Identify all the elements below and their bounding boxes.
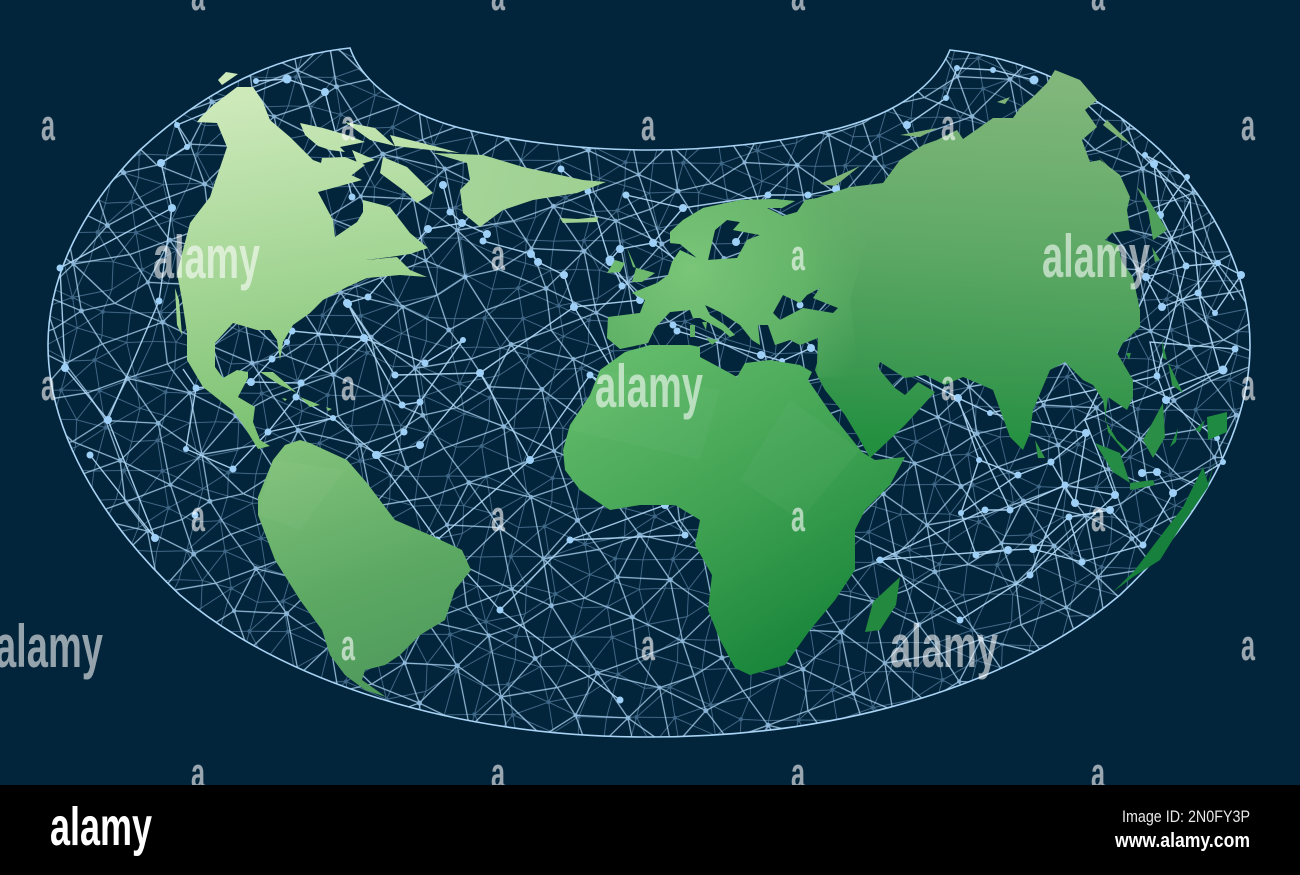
watermark: large alamy marks: alamy <box>0 613 103 680</box>
watermark: small a marks: a <box>641 101 655 150</box>
network map frame <box>40 40 1260 740</box>
watermark: small a marks: a <box>941 101 955 150</box>
Borneo <box>1143 403 1165 458</box>
watermark: large alamy marks <box>0 223 1150 680</box>
image id: Image ID: 2N0FY3P <box>1122 807 1250 826</box>
Philippines <box>1126 340 1183 393</box>
Arctic islands <box>218 72 460 203</box>
map outline <box>48 48 1250 737</box>
watermark: small a marks: a <box>791 231 805 280</box>
New Guinea <box>1170 412 1227 447</box>
British Isles <box>607 248 655 282</box>
watermark: small a marks: a <box>41 101 55 150</box>
continent: Greenland <box>433 153 606 227</box>
watermark: small a marks: a <box>491 231 505 280</box>
watermark: small a marks: a <box>941 361 955 410</box>
watermark: small a marks: a <box>191 492 205 541</box>
watermark: small a marks: a <box>491 749 505 798</box>
watermark: large alamy marks: alamy <box>595 353 703 420</box>
network nodes <box>56 65 1245 704</box>
Caribbean islands <box>260 372 332 411</box>
footer logo: alamy <box>50 797 152 857</box>
Baja California <box>175 288 182 335</box>
watermark: large alamy marks: alamy <box>1042 223 1150 290</box>
continent: Eurasia <box>607 70 1227 592</box>
Japan <box>1137 187 1167 262</box>
footer bar <box>0 785 1300 875</box>
watermark: small a marks: a <box>1241 361 1255 410</box>
Sakhalin and Arctic islands <box>820 97 1130 186</box>
website: www.alamy.com <box>1114 830 1250 852</box>
watermark: small a marks: a <box>1091 492 1105 541</box>
watermark: small a marks: a <box>1241 101 1255 150</box>
watermark: small a marks: a <box>341 621 355 670</box>
watermark: small a marks: a <box>641 621 655 670</box>
watermark: small a marks: a <box>341 101 355 150</box>
watermark: small a marks: a <box>191 749 205 798</box>
Sumatra and Java <box>1095 443 1155 490</box>
continent: North America <box>175 72 460 449</box>
watermark: small a marks: a <box>491 492 505 541</box>
watermark: small a marks: a <box>1241 621 1255 670</box>
continent: Africa <box>563 345 905 675</box>
watermark: small a marks: a <box>41 361 55 410</box>
watermark: large alamy marks: alamy <box>153 224 260 291</box>
Mediterranean islands <box>690 322 718 345</box>
island: Madagascar <box>865 577 900 632</box>
Iceland <box>560 217 598 223</box>
watermark: large alamy marks: alamy <box>890 613 998 680</box>
continent: South America <box>258 440 471 697</box>
watermark: small a marks: a <box>791 749 805 798</box>
Sri Lanka <box>1035 440 1045 458</box>
watermark: small a marks: a <box>1091 749 1105 798</box>
Australia sliver <box>1113 460 1215 592</box>
watermark: small a marks: a <box>341 361 355 410</box>
watermark: small a marks: a <box>791 492 805 541</box>
